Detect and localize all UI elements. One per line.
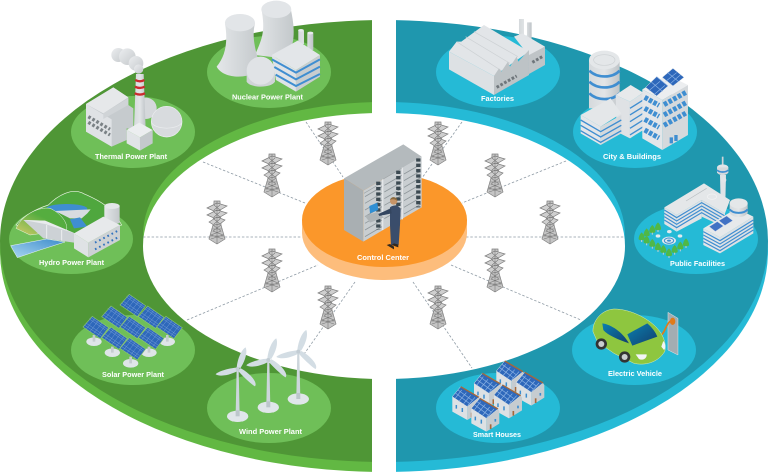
icon: transmission tower 4 xyxy=(262,249,282,292)
label: Smart Houses xyxy=(473,432,521,439)
panel: public facilities xyxy=(634,157,758,274)
icon: factory xyxy=(449,19,545,95)
dashed connection lines xyxy=(143,122,625,368)
label: Factories xyxy=(481,96,514,103)
panel: nuclear power plant xyxy=(207,1,331,108)
label: Thermal Power Plant xyxy=(95,154,168,161)
icon: transmission tower 1 xyxy=(318,122,338,165)
icon: transmission tower 7 xyxy=(485,154,505,197)
panel: thermal power plant xyxy=(71,48,195,168)
label: Hydro Power Plant xyxy=(39,260,105,267)
icon: solar panels xyxy=(83,294,182,368)
label: Control Center xyxy=(357,255,409,262)
icon: hydro plant xyxy=(11,191,122,258)
panel: solar power plant xyxy=(71,294,195,385)
panel: city and buildings xyxy=(573,51,697,168)
icon: transmission tower 5 xyxy=(318,286,338,329)
panel: control center xyxy=(302,144,467,280)
label: Solar Power Plant xyxy=(102,372,165,379)
panel: electric vehicle xyxy=(572,309,696,385)
label: Electric Vehicle xyxy=(608,371,662,378)
panel: hydro power plant xyxy=(9,191,133,274)
icon: transmission tower 8 xyxy=(540,201,560,244)
label: Nuclear Power Plant xyxy=(232,94,304,102)
icon: transmission tower 9 xyxy=(485,249,505,292)
icon: transmission tower 2 xyxy=(262,154,282,197)
icon: wind turbines xyxy=(216,330,316,422)
panel: smart houses xyxy=(436,361,560,443)
panel: factories xyxy=(436,19,560,108)
panel: green generation half ring xyxy=(0,20,372,472)
icon: thermal plant xyxy=(86,48,182,151)
label: Public Facilities xyxy=(670,261,725,268)
icon: server racks and operator xyxy=(344,144,422,249)
icon: city buildings xyxy=(581,51,688,150)
label: City & Buildings xyxy=(603,154,661,161)
icon: transmission tower 3 xyxy=(207,201,227,244)
icon: nuclear plant xyxy=(217,1,320,92)
panel: blue consumption half ring xyxy=(396,20,768,472)
panel: wind power plant xyxy=(207,330,331,443)
platform disc xyxy=(302,173,467,280)
icon: transmission tower 10 xyxy=(428,286,448,329)
icon: smart houses xyxy=(452,361,544,432)
icon: public facilities xyxy=(639,157,753,258)
label: Wind Power Plant xyxy=(239,429,303,436)
inner white area xyxy=(143,113,625,379)
icon: electric car and charger xyxy=(593,309,678,364)
icon: transmission tower 6 xyxy=(428,122,448,165)
